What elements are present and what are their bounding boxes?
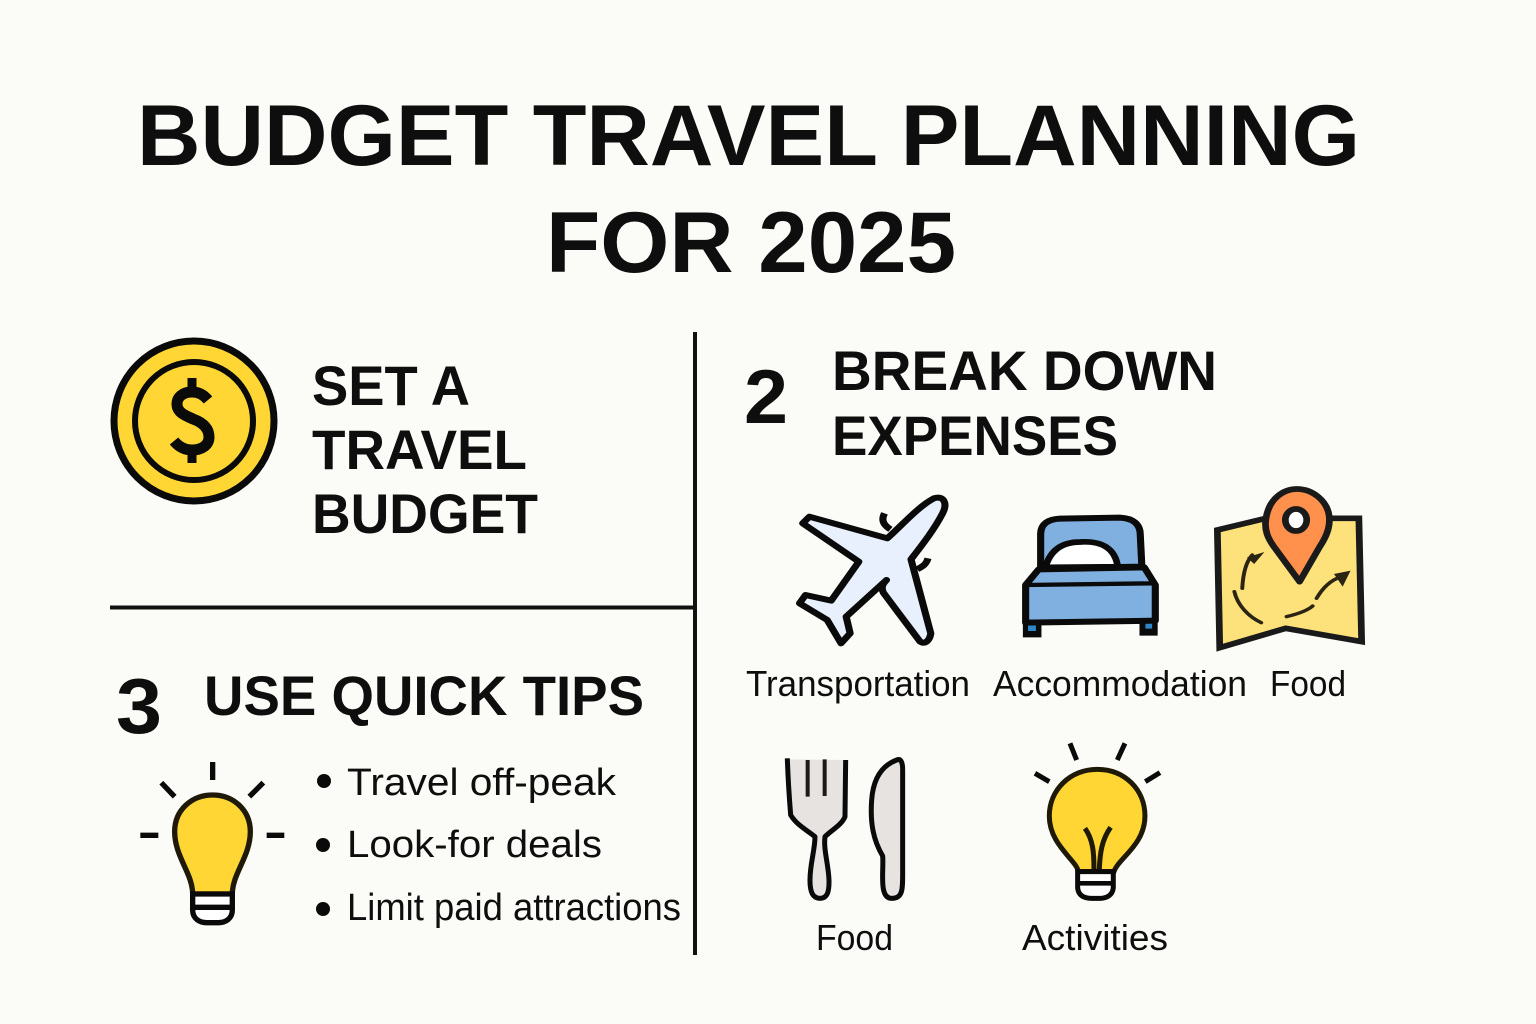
- heading: break down expenses: EXPENSES: [832, 404, 1118, 467]
- tips list: Look-for deals: [347, 824, 602, 866]
- title: FOR 2025: [546, 195, 956, 291]
- panel: set a travel budget: [114, 341, 538, 545]
- icon: airplane: [800, 498, 945, 643]
- tips list: Limit paid attractions: [347, 887, 681, 929]
- panel: break down expenses: [744, 339, 1362, 958]
- heading: use quick tips: USE QUICK TIPS: [204, 664, 644, 727]
- heading: set a travel budget: BUDGET: [312, 482, 538, 545]
- step number 2: 2: [744, 355, 788, 440]
- icon: bed: [1023, 518, 1158, 637]
- panel: use quick tips: [116, 662, 681, 929]
- tips list: Travel off-peak: [347, 762, 617, 804]
- label: food (second): Food: [816, 917, 893, 958]
- label: transportation: Transportation: [746, 663, 970, 704]
- label: activities: Activities: [1022, 917, 1168, 958]
- icon: map with pin: [1217, 489, 1362, 648]
- title: [137, 88, 1360, 291]
- icon: dollar coin: [114, 341, 274, 501]
- label: food: Food: [1270, 663, 1346, 704]
- icon: fork and knife: [787, 758, 903, 898]
- tips list: [316, 762, 681, 929]
- icon: light bulb tips: [140, 762, 284, 923]
- label: accommodation: Accommodation: [993, 663, 1247, 704]
- heading: set a travel budget: [312, 354, 538, 545]
- step number 3: 3: [116, 662, 162, 750]
- title: BUDGET TRAVEL PLANNING: [137, 88, 1360, 184]
- heading: set a travel budget: SET A: [312, 354, 470, 417]
- heading: break down expenses: BREAK DOWN: [832, 339, 1217, 402]
- heading: break down expenses: [832, 339, 1217, 467]
- icon: light bulb activities: [1035, 743, 1160, 898]
- heading: set a travel budget: TRAVEL: [312, 418, 527, 481]
